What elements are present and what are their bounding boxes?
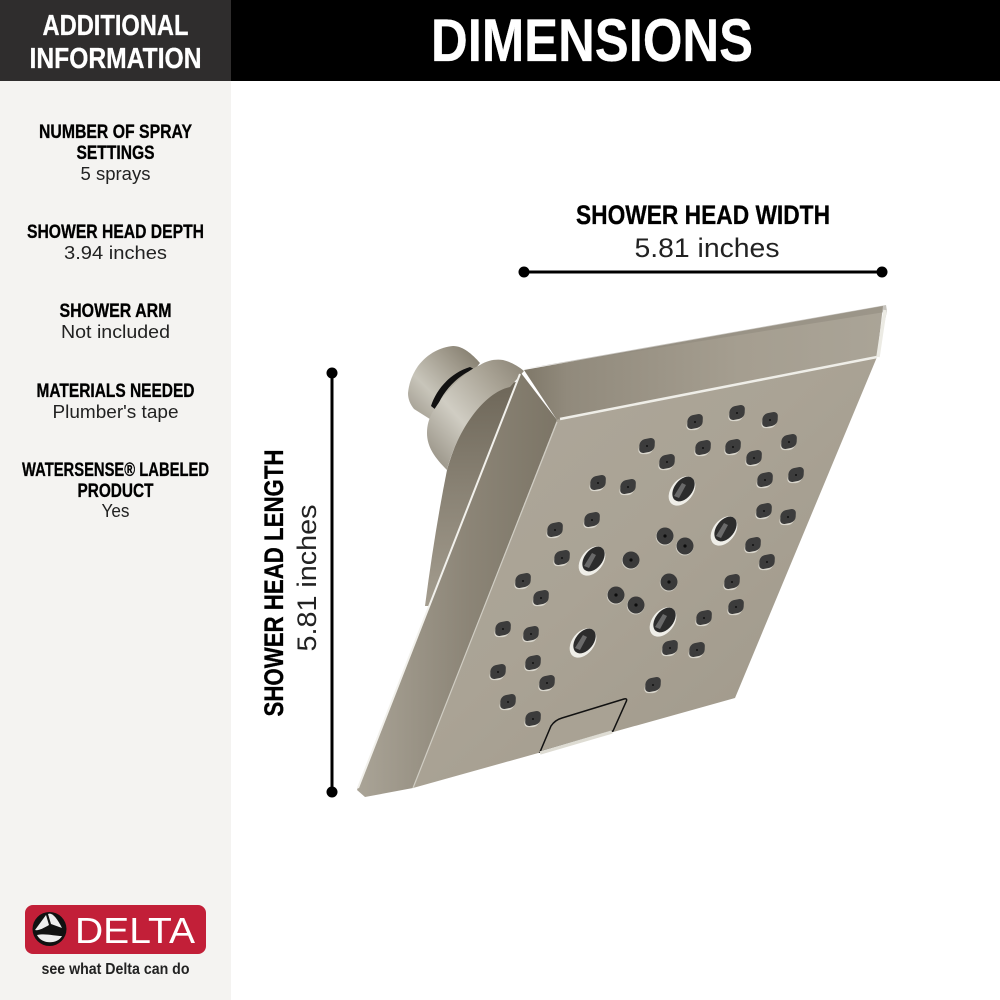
spec: shower head depth: 3.94 inches — [64, 243, 167, 263]
spec: watersense labeled product — [22, 460, 209, 521]
spec: shower arm: Not included — [61, 322, 170, 342]
length dimension arrow — [326, 368, 338, 798]
large sprayers — [564, 471, 743, 663]
width dimension label: SHOWER HEAD WIDTH — [576, 200, 830, 230]
arm body — [425, 380, 522, 606]
header: additional information: ADDITIONAL — [42, 10, 188, 42]
spray nozzles — [488, 404, 804, 727]
spec: materials needed — [36, 381, 194, 422]
spec: shower arm: SHOWER ARM — [60, 301, 172, 322]
delta logo: DELTA — [75, 910, 195, 951]
length dimension label: 5.81 inches — [292, 504, 322, 652]
top bevel — [524, 306, 883, 420]
width dimension label — [576, 200, 830, 263]
width dimension label: 5.81 inches — [634, 233, 780, 263]
spec: number of spray settings — [39, 122, 192, 184]
spec: number of spray settings: 5 sprays — [80, 164, 150, 184]
header: dimensions — [231, 0, 1000, 81]
width dimension arrow — [518, 266, 888, 278]
spec: materials needed: MATERIALS NEEDED — [36, 381, 194, 402]
face plate — [413, 357, 877, 788]
highlights — [560, 357, 877, 419]
product: shower head — [357, 305, 887, 797]
header: additional information: INFORMATION — [30, 43, 202, 75]
spec: shower arm — [60, 301, 172, 342]
spec: shower head depth — [27, 222, 204, 263]
delta logo — [25, 905, 206, 978]
spec: number of spray settings: SETTINGS — [76, 143, 154, 164]
delta logo: see what Delta can do — [42, 961, 190, 978]
spec: number of spray settings: NUMBER OF SPRAY — [39, 122, 192, 143]
spec: materials needed: Plumber's tape — [52, 402, 178, 422]
sidebar background — [0, 81, 231, 1000]
header: additional information — [0, 0, 231, 81]
length dimension label: SHOWER HEAD LENGTH — [259, 450, 289, 716]
selector tab — [540, 699, 627, 752]
spec: watersense labeled product: PRODUCT — [78, 481, 154, 502]
spec: shower head depth: SHOWER HEAD DEPTH — [27, 222, 204, 243]
arm cylinder — [408, 346, 480, 421]
left bevel — [357, 373, 557, 797]
arm collar — [427, 360, 524, 470]
spec: watersense labeled product: WATERSENSE® LABELED — [22, 460, 209, 481]
header: dimensions: DIMENSIONS — [431, 7, 753, 74]
length dimension label — [259, 450, 322, 716]
spec: watersense labeled product: Yes — [102, 501, 130, 521]
